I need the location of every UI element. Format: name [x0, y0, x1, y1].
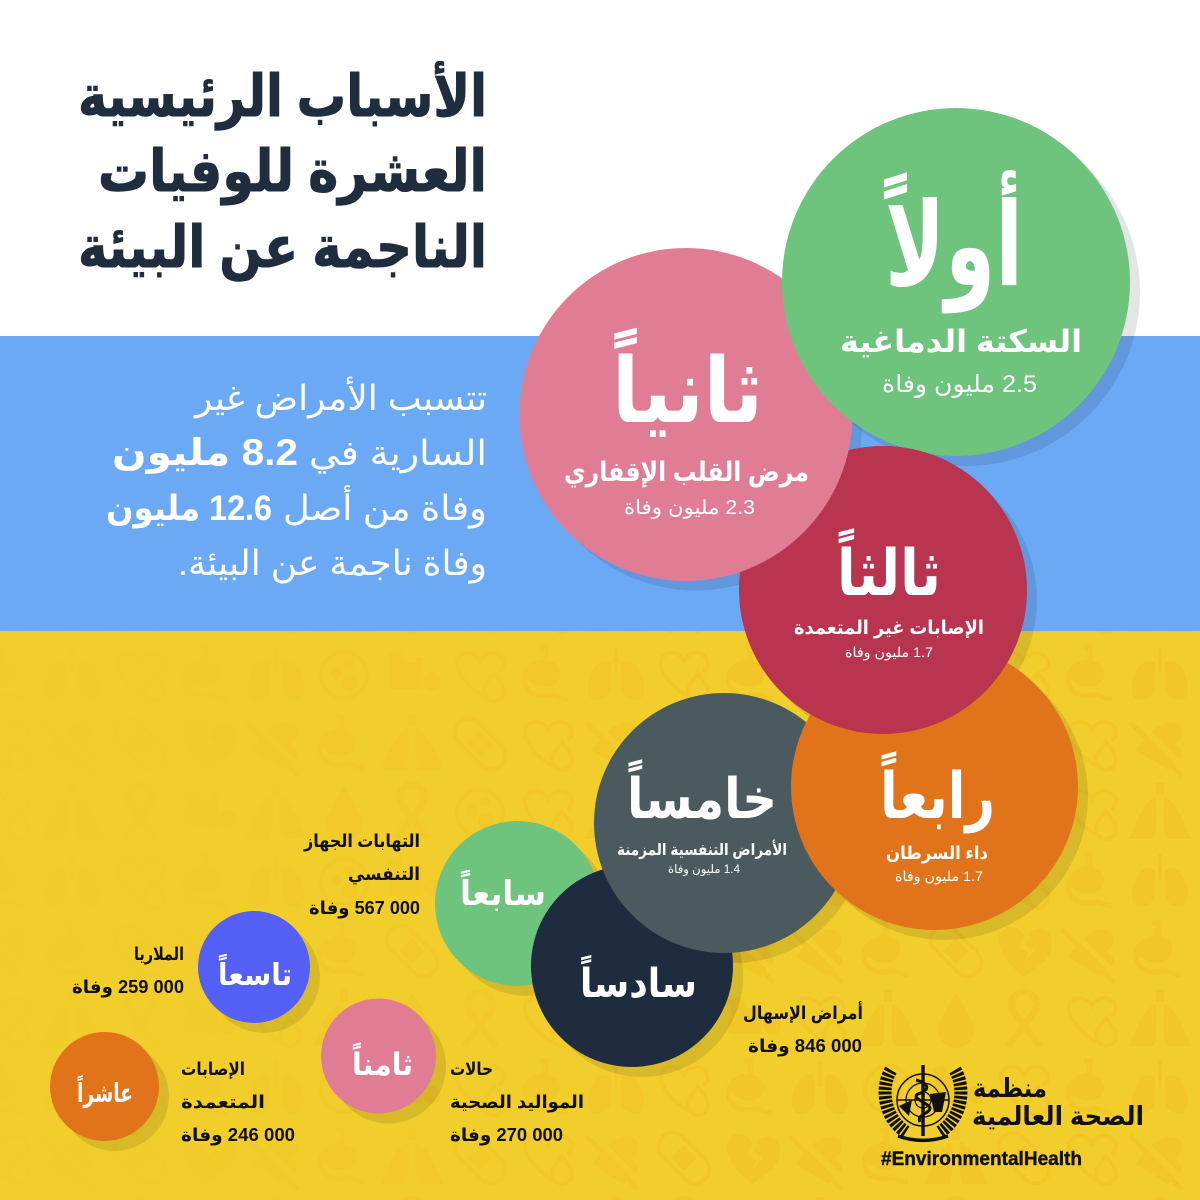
circle 3: unintentional injuries	[739, 446, 1027, 734]
intro text block: تتسبب الأمراض غير	[193, 376, 487, 419]
circle 2: ischaemic heart disease: 2.3 مليون وفاة	[624, 497, 755, 519]
caption: neonatal conditions: حالات	[450, 1059, 493, 1079]
WHO logo: منظمة	[973, 1073, 1047, 1103]
circle 9: malaria: تاسعاً	[218, 953, 292, 992]
circle 10: intentional injuries: عاشراً	[77, 1074, 133, 1109]
circle 3: unintentional injuries: الإصابات غير المتعمدة	[794, 618, 984, 639]
circle 1: stroke: السكتة الدماغية	[840, 324, 1082, 359]
title	[78, 61, 487, 282]
WHO logo: الصحة العالمية	[972, 1101, 1144, 1131]
caption: respiratory infections: التنفسي	[348, 864, 420, 885]
caption: intentional injuries: المتعمدة	[181, 1092, 265, 1112]
caption: malaria: 000 259 وفاة	[72, 977, 184, 998]
intro text block: 12.6 مليون	[106, 489, 272, 529]
circle 5: chronic respiratory diseases: خامساً	[627, 759, 777, 830]
circle 4: cancers: رابعاً	[880, 751, 995, 834]
circle 2: ischaemic heart disease: مرض القلب الإقفاري	[564, 457, 809, 488]
intro text block: وفاة ناجمة عن البيئة.	[178, 544, 487, 584]
background: blue band	[0, 336, 1200, 631]
circle 7: respiratory infections: سابعاً	[460, 869, 546, 913]
circle 6: diarrhoeal diseases	[531, 865, 733, 1067]
caption: neonatal conditions: 000 270 وفاة	[450, 1125, 563, 1146]
WHO logo	[885, 1065, 1144, 1140]
title: الناجمة عن البيئة	[78, 215, 487, 282]
circle 3: unintentional injuries: 1.7 مليون وفاة	[845, 644, 933, 661]
hashtag: #EnvironmentalHealth	[881, 1149, 1082, 1170]
caption: intentional injuries: الإصابات	[181, 1059, 245, 1079]
circle 4: cancers: داء السرطان	[886, 843, 988, 864]
intro text block: وفاة من أصل	[283, 485, 487, 529]
caption: respiratory infections: 000 567 وفاة	[309, 898, 420, 919]
circle 5: chronic respiratory diseases: 1.4 مليون وفاة	[668, 862, 740, 877]
intro text block	[106, 376, 487, 584]
circle 6: diarrhoeal diseases: سادساً	[580, 954, 697, 1006]
circle 8: neonatal conditions: ثامناً	[352, 1042, 413, 1082]
background: yellow band	[0, 631, 1200, 1200]
circle 2: ischaemic heart disease: ثانياً	[612, 327, 763, 442]
circle 4: cancers	[791, 643, 1078, 930]
circle 10: intentional injuries	[50, 1032, 159, 1141]
circle 3: unintentional injuries: ثالثاً	[837, 528, 941, 609]
circle 1: stroke: 2.5 مليون وفاة	[882, 371, 1037, 398]
circle 4: cancers: 1.7 مليون وفاة	[895, 868, 983, 885]
circle 2: ischaemic heart disease	[520, 248, 852, 581]
circle 7: respiratory infections	[435, 821, 600, 986]
background: health icon pattern	[0, 631, 1200, 1200]
intro text block: 8.2 مليون	[112, 432, 298, 474]
circle 5: chronic respiratory diseases: الأمراض التنفسية المزمنة	[617, 840, 787, 859]
caption: respiratory infections	[303, 831, 420, 919]
circle 1: stroke	[782, 108, 1130, 456]
circle 5: chronic respiratory diseases	[594, 693, 854, 953]
intro text block: السارية في	[309, 434, 487, 474]
background: white band	[0, 0, 1200, 336]
caption: intentional injuries: 000 246 وفاة	[181, 1125, 295, 1146]
caption: neonatal conditions: المواليد الصحية	[450, 1092, 584, 1113]
caption: diarrhoeal diseases: 000 846 وفاة	[748, 1036, 862, 1057]
circle 8: neonatal conditions	[321, 998, 436, 1114]
circle 9: malaria	[198, 911, 310, 1023]
caption: intentional injuries	[181, 1059, 295, 1146]
circle 1: stroke: أولاً	[884, 169, 1023, 314]
icon: WHO emblem	[885, 1065, 961, 1140]
caption: neonatal conditions	[450, 1059, 584, 1146]
caption: malaria	[72, 944, 184, 998]
title: العشرة للوفيات	[98, 139, 487, 206]
caption: diarrhoeal diseases: أمراض الإسهال	[743, 1001, 863, 1024]
caption: malaria: الملاريا	[134, 944, 184, 964]
caption: diarrhoeal diseases	[743, 1001, 863, 1057]
caption: respiratory infections: التهابات الجهاز	[303, 831, 420, 852]
title: الأسباب الرئيسية	[78, 61, 487, 131]
